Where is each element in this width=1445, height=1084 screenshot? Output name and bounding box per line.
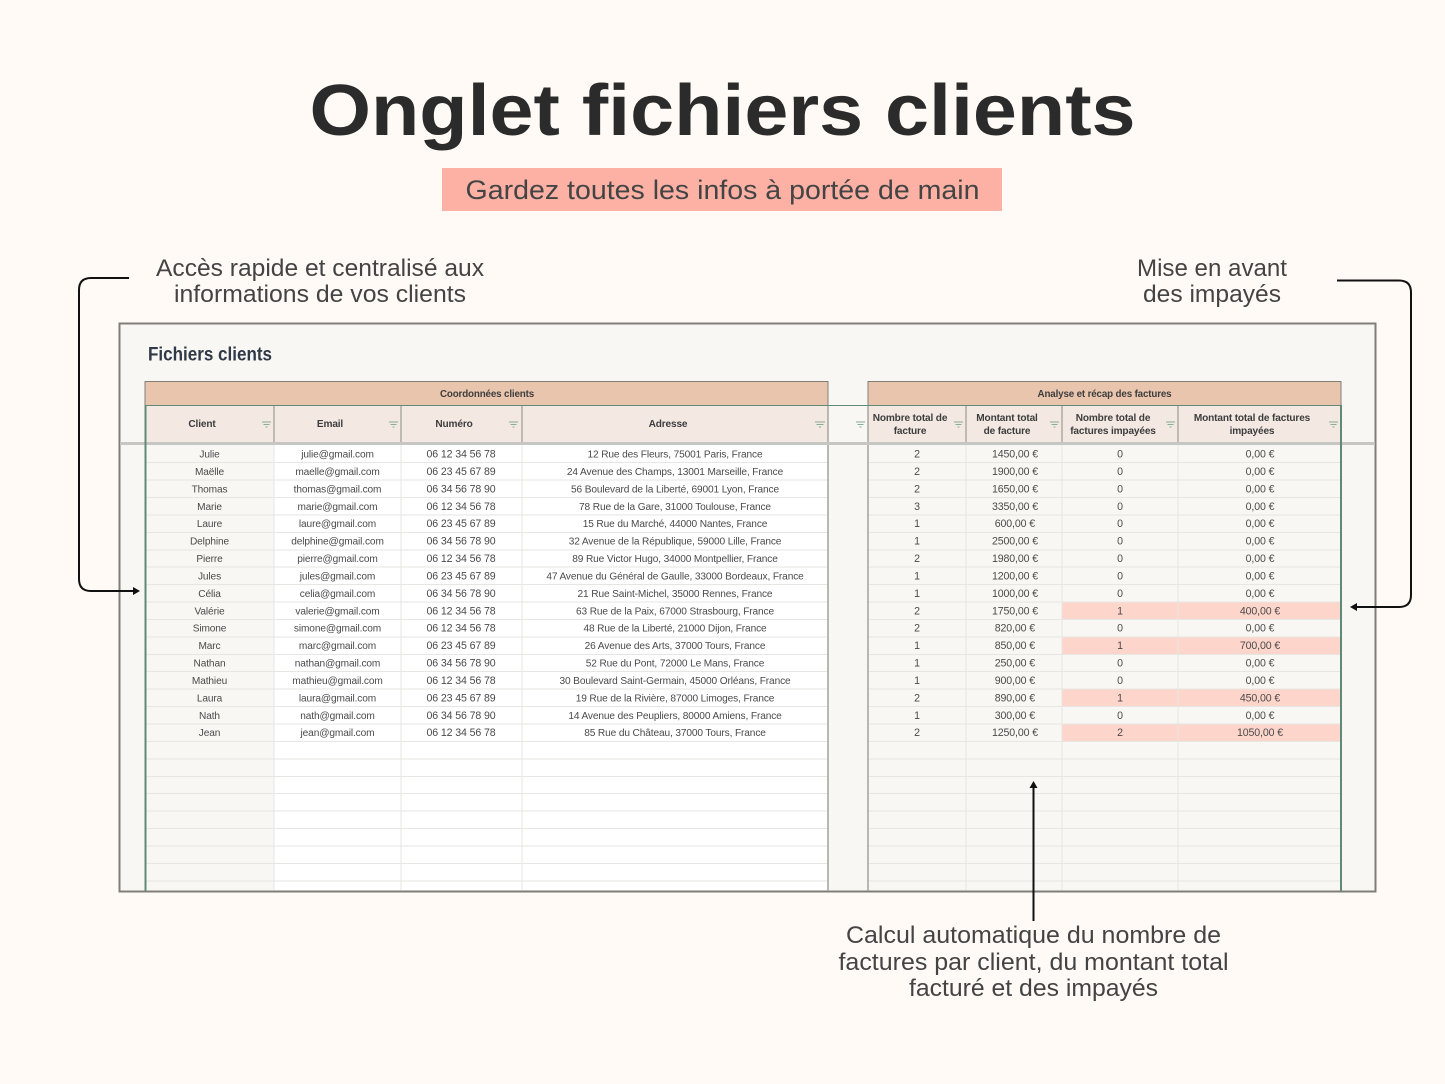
annotation: calcul automatique xyxy=(838,922,1228,1002)
row: Pierre: 0 xyxy=(1117,553,1123,565)
row: Jules: jules@gmail.com xyxy=(299,571,375,582)
row: Jean: 1250,00 € xyxy=(992,727,1038,739)
panel: fichiers clients spreadsheet xyxy=(120,324,1376,892)
row: Maëlle: 06 23 45 67 89 xyxy=(426,466,496,478)
row: Marc: 850,00 € xyxy=(995,640,1035,652)
row: Delphine: 0 xyxy=(1117,536,1123,548)
row: Laure: 1 xyxy=(914,518,920,530)
column headers: Montant total xyxy=(976,413,1038,424)
annotation: calcul automatique: facturé et des impayés xyxy=(909,975,1158,1002)
row: Nath: 06 34 56 78 90 xyxy=(426,710,496,722)
row: Jules: 1200,00 € xyxy=(992,570,1038,582)
row: Jules: 0 xyxy=(1117,570,1123,582)
row: Julie: 12 Rue des Fleurs, 75001 Paris, France xyxy=(588,450,763,460)
row: Maëlle xyxy=(195,466,1275,478)
column headers: impayées xyxy=(1230,426,1275,437)
row: Maëlle: 0,00 € xyxy=(1246,466,1275,478)
row: Nath: nath@gmail.com xyxy=(300,711,375,722)
row: Simone: Simone xyxy=(193,624,227,635)
row: Julie: 0,00 € xyxy=(1246,448,1275,460)
row: Jean: jean@gmail.com xyxy=(300,728,374,739)
row: Valérie: 06 12 34 56 78 xyxy=(426,605,496,617)
row: Marc: 06 23 45 67 89 xyxy=(426,640,496,652)
annotation: accès rapide: informations de vos clients xyxy=(174,281,466,308)
column headers: Email xyxy=(317,419,343,430)
annotation: mise en avant: Mise en avant xyxy=(1137,255,1287,282)
row: Jules: Jules xyxy=(198,571,221,582)
row: Delphine: delphine@gmail.com xyxy=(291,537,384,548)
frozen row divider xyxy=(120,442,1375,445)
row: Julie: 2 xyxy=(914,448,920,460)
row: Thomas: 0,00 € xyxy=(1246,483,1275,495)
column headers: Nombre total de xyxy=(873,413,948,424)
row: Valérie: valerie@gmail.com xyxy=(295,606,380,617)
row: Nath: 1 xyxy=(914,710,920,722)
row: Laure: Laure xyxy=(197,519,223,530)
row: Julie xyxy=(199,448,1275,460)
row: Nathan: 52 Rue du Pont, 72000 Le Mans, France xyxy=(586,658,765,670)
row: Simone: simone@gmail.com xyxy=(294,624,381,635)
row: Simone: 2 xyxy=(914,623,920,635)
row: Maëlle: 0 xyxy=(1117,466,1123,478)
row: Jules: 06 23 45 67 89 xyxy=(426,570,496,582)
row: Thomas: thomas@gmail.com xyxy=(294,484,381,495)
row: Julie: 1450,00 € xyxy=(992,448,1038,460)
row: Marc: 1 xyxy=(1117,640,1123,652)
row: Laura: 2 xyxy=(914,692,920,704)
row: Valérie: 1750,00 € xyxy=(992,605,1038,617)
row: Marc: 1 xyxy=(914,640,920,652)
row: Pierre: 2 xyxy=(914,553,920,565)
sheet heading: Fichiers clients xyxy=(148,344,272,366)
annotation: mise en avant: des impayés xyxy=(1143,281,1281,308)
arrow: calcul automatique xyxy=(1030,781,1038,921)
row: Jean: 06 12 34 56 78 xyxy=(426,727,496,739)
annotation: mise en avant xyxy=(1137,255,1287,308)
row: Valérie: 2 xyxy=(914,605,920,617)
row: Nath xyxy=(199,710,1275,722)
row: Mathieu: 06 12 34 56 78 xyxy=(426,675,496,687)
row: Delphine: 0,00 € xyxy=(1246,536,1275,548)
row: Marie: Marie xyxy=(197,502,222,513)
row: Marie: 3 xyxy=(914,501,920,513)
row: Mathieu: Mathieu xyxy=(192,676,227,687)
row: Simone: 48 Rue de la Liberté, 21000 Dijon, France xyxy=(583,624,767,635)
row: Simone: 820,00 € xyxy=(995,623,1035,635)
arrow: left bracket xyxy=(79,278,140,595)
row: Marc: 26 Avenue des Arts, 37000 Tours, France xyxy=(585,641,766,652)
row: Thomas: 56 Boulevard de la Liberté, 69001 Lyon, France xyxy=(571,484,779,495)
row: Delphine: 32 Avenue de la République, 59000 Lille, France xyxy=(569,537,782,548)
row: Laura: 19 Rue de la Rivière, 87000 Limoges, France xyxy=(576,693,775,704)
row: Julie: julie@gmail.com xyxy=(300,450,374,460)
row: Nath: 0 xyxy=(1117,710,1123,722)
row: Nathan: nathan@gmail.com xyxy=(295,658,380,670)
row: Jean: 2 xyxy=(914,727,920,739)
row: Marie: 78 Rue de la Gare, 31000 Toulouse, France xyxy=(579,502,771,513)
table body backgrounds xyxy=(146,445,1340,890)
row: Mathieu: 0,00 € xyxy=(1246,675,1275,687)
row: Mathieu: 30 Boulevard Saint-Germain, 45000 Orléans, France xyxy=(559,676,791,687)
row: Delphine: 1 xyxy=(914,536,920,548)
row: Pierre xyxy=(196,553,1275,565)
row: Mathieu: 1 xyxy=(914,675,920,687)
row: Célia xyxy=(198,588,1275,600)
row: Laura xyxy=(197,692,1280,704)
row: Laure: 15 Rue du Marché, 44000 Nantes, France xyxy=(583,519,768,530)
annotation: accès rapide: Accès rapide et centralisé aux xyxy=(156,255,484,282)
row: Jules: 47 Avenue du Général de Gaulle, 33000 Bordeaux, France xyxy=(546,571,804,582)
row: Mathieu: mathieu@gmail.com xyxy=(292,676,383,687)
column headers: factures impayées xyxy=(1070,426,1156,437)
row: Marie xyxy=(197,501,1275,513)
subtitle banner: Gardez toutes les infos à portée de main xyxy=(466,175,980,205)
row: Marie: 3350,00 € xyxy=(992,501,1038,513)
row: Laure xyxy=(197,518,1275,530)
row: Jules: 1 xyxy=(914,570,920,582)
row: Julie: Julie xyxy=(199,450,220,460)
row: Laura: laura@gmail.com xyxy=(299,693,376,704)
row: Maëlle: Maëlle xyxy=(195,467,225,478)
row: Valérie: 400,00 € xyxy=(1240,605,1280,617)
row: Laure: 0,00 € xyxy=(1246,518,1275,530)
column headers xyxy=(145,406,1341,442)
row: Simone: 06 12 34 56 78 xyxy=(426,623,496,635)
row: Valérie: 1 xyxy=(1117,605,1123,617)
row: Célia: celia@gmail.com xyxy=(300,589,375,600)
row: Julie: 06 12 34 56 78 xyxy=(426,448,496,460)
row: Maëlle: 2 xyxy=(914,466,920,478)
column headers: Montant total de factures xyxy=(1194,413,1311,424)
row: Nathan: 0 xyxy=(1117,658,1123,670)
row: Nathan: 0,00 € xyxy=(1246,658,1275,670)
row: Pierre: 89 Rue Victor Hugo, 34000 Montpellier, France xyxy=(572,554,778,565)
title: Onglet fichiers clients xyxy=(310,71,1136,151)
row: Nathan: 250,00 € xyxy=(995,658,1035,670)
row: Jules xyxy=(198,570,1275,582)
column headers: Numéro xyxy=(435,419,473,430)
row: Maëlle: 1900,00 € xyxy=(992,466,1038,478)
row: Célia: Célia xyxy=(198,589,221,600)
row: Valérie xyxy=(195,605,1280,617)
row: Jean: 85 Rue du Château, 37000 Tours, France xyxy=(584,728,766,739)
row: Simone xyxy=(193,623,1275,635)
row: Maëlle: maelle@gmail.com xyxy=(295,467,380,478)
row: Marc xyxy=(198,640,1280,652)
filter icons xyxy=(262,422,1338,427)
row: Marc: 700,00 € xyxy=(1240,640,1280,652)
row: Nathan: 1 xyxy=(914,658,920,670)
row: Laura: 450,00 € xyxy=(1240,692,1280,704)
row: Célia: 0,00 € xyxy=(1246,588,1275,600)
row: Jean: 2 xyxy=(1117,727,1123,739)
column headers: de facture xyxy=(984,426,1031,437)
row: Laura: 06 23 45 67 89 xyxy=(426,692,496,704)
row: Nathan: Nathan xyxy=(194,658,225,670)
row: Marie: 06 12 34 56 78 xyxy=(426,501,496,513)
row: Célia: 0 xyxy=(1117,588,1123,600)
row: Thomas: 0 xyxy=(1117,483,1123,495)
row: Mathieu: 900,00 € xyxy=(995,675,1035,687)
row: Célia: 21 Rue Saint-Michel, 35000 Rennes, France xyxy=(578,589,773,600)
table group header: coordonnées clients: Coordonnées clients xyxy=(440,389,535,400)
row: Mathieu xyxy=(192,675,1275,687)
row: Thomas: Thomas xyxy=(192,484,227,495)
row: Mathieu: 0 xyxy=(1117,675,1123,687)
row: Laura: Laura xyxy=(197,693,223,704)
row: Delphine xyxy=(190,536,1275,548)
column headers: Nombre total de xyxy=(1076,413,1151,424)
arrow: right bracket xyxy=(1337,280,1411,611)
row: Valérie: 63 Rue de la Paix, 67000 Strasbourg, France xyxy=(576,606,775,617)
column headers: Client xyxy=(188,419,216,430)
row: Célia: 06 34 56 78 90 xyxy=(426,588,496,600)
row: Thomas xyxy=(192,483,1275,495)
table borders xyxy=(146,405,1341,891)
row: Nath: 300,00 € xyxy=(995,710,1035,722)
row: Laura: 890,00 € xyxy=(995,692,1035,704)
row: Laure: 600,00 € xyxy=(995,518,1035,530)
row: Célia: 1000,00 € xyxy=(992,588,1038,600)
row: Simone: 0 xyxy=(1117,623,1123,635)
row: Pierre: Pierre xyxy=(196,554,223,565)
row: Simone: 0,00 € xyxy=(1246,623,1275,635)
row: Nathan xyxy=(194,658,1275,670)
row: Thomas: 06 34 56 78 90 xyxy=(426,483,496,495)
row: Marie: 0 xyxy=(1117,501,1123,513)
subtitle banner xyxy=(442,168,1002,211)
table group header: coordonnées clients xyxy=(145,382,828,406)
row: Laure: laure@gmail.com xyxy=(299,519,376,530)
row: Laure: 0 xyxy=(1117,518,1123,530)
row: Valérie: Valérie xyxy=(195,606,225,617)
row: Jean: Jean xyxy=(199,728,220,739)
row: Maëlle: 24 Avenue des Champs, 13001 Marseille, France xyxy=(567,467,784,478)
row: Jean: 1050,00 € xyxy=(1237,727,1283,739)
row: Marc: marc@gmail.com xyxy=(299,641,376,652)
row: Laura: 1 xyxy=(1117,692,1123,704)
row: Pierre: 06 12 34 56 78 xyxy=(426,553,496,565)
row: Thomas: 2 xyxy=(914,483,920,495)
row: Marc: Marc xyxy=(198,641,221,652)
row: Delphine: 2500,00 € xyxy=(992,536,1038,548)
column headers: Adresse xyxy=(649,419,688,430)
table group header: analyse et récap xyxy=(868,382,1341,406)
row: Julie: 0 xyxy=(1117,448,1123,460)
row: Pierre: pierre@gmail.com xyxy=(297,554,378,565)
row: Delphine: 06 34 56 78 90 xyxy=(426,536,496,548)
row: Marie: 0,00 € xyxy=(1246,501,1275,513)
row: Nath: 0,00 € xyxy=(1246,710,1275,722)
annotation: calcul automatique: Calcul automatique du nombre de xyxy=(846,922,1221,949)
row: Jean xyxy=(199,727,1283,739)
annotation: calcul automatique: factures par client, du montant total xyxy=(838,949,1228,976)
row: Pierre: 1980,00 € xyxy=(992,553,1038,565)
row: Nathan: 06 34 56 78 90 xyxy=(426,658,496,670)
table group header: analyse et récap: Analyse et récap des factures xyxy=(1038,389,1172,400)
row: Jules: 0,00 € xyxy=(1246,570,1275,582)
row: Pierre: 0,00 € xyxy=(1246,553,1275,565)
row: Thomas: 1650,00 € xyxy=(992,483,1038,495)
row: Nath: Nath xyxy=(199,711,220,722)
row: Célia: 1 xyxy=(914,588,920,600)
row: Nath: 14 Avenue des Peupliers, 80000 Amiens, France xyxy=(568,711,782,722)
row: Delphine: Delphine xyxy=(190,537,229,548)
row: Laure: 06 23 45 67 89 xyxy=(426,518,496,530)
row: Marie: marie@gmail.com xyxy=(298,502,377,513)
column headers: facture xyxy=(894,426,927,437)
annotation: accès rapide xyxy=(156,255,484,308)
